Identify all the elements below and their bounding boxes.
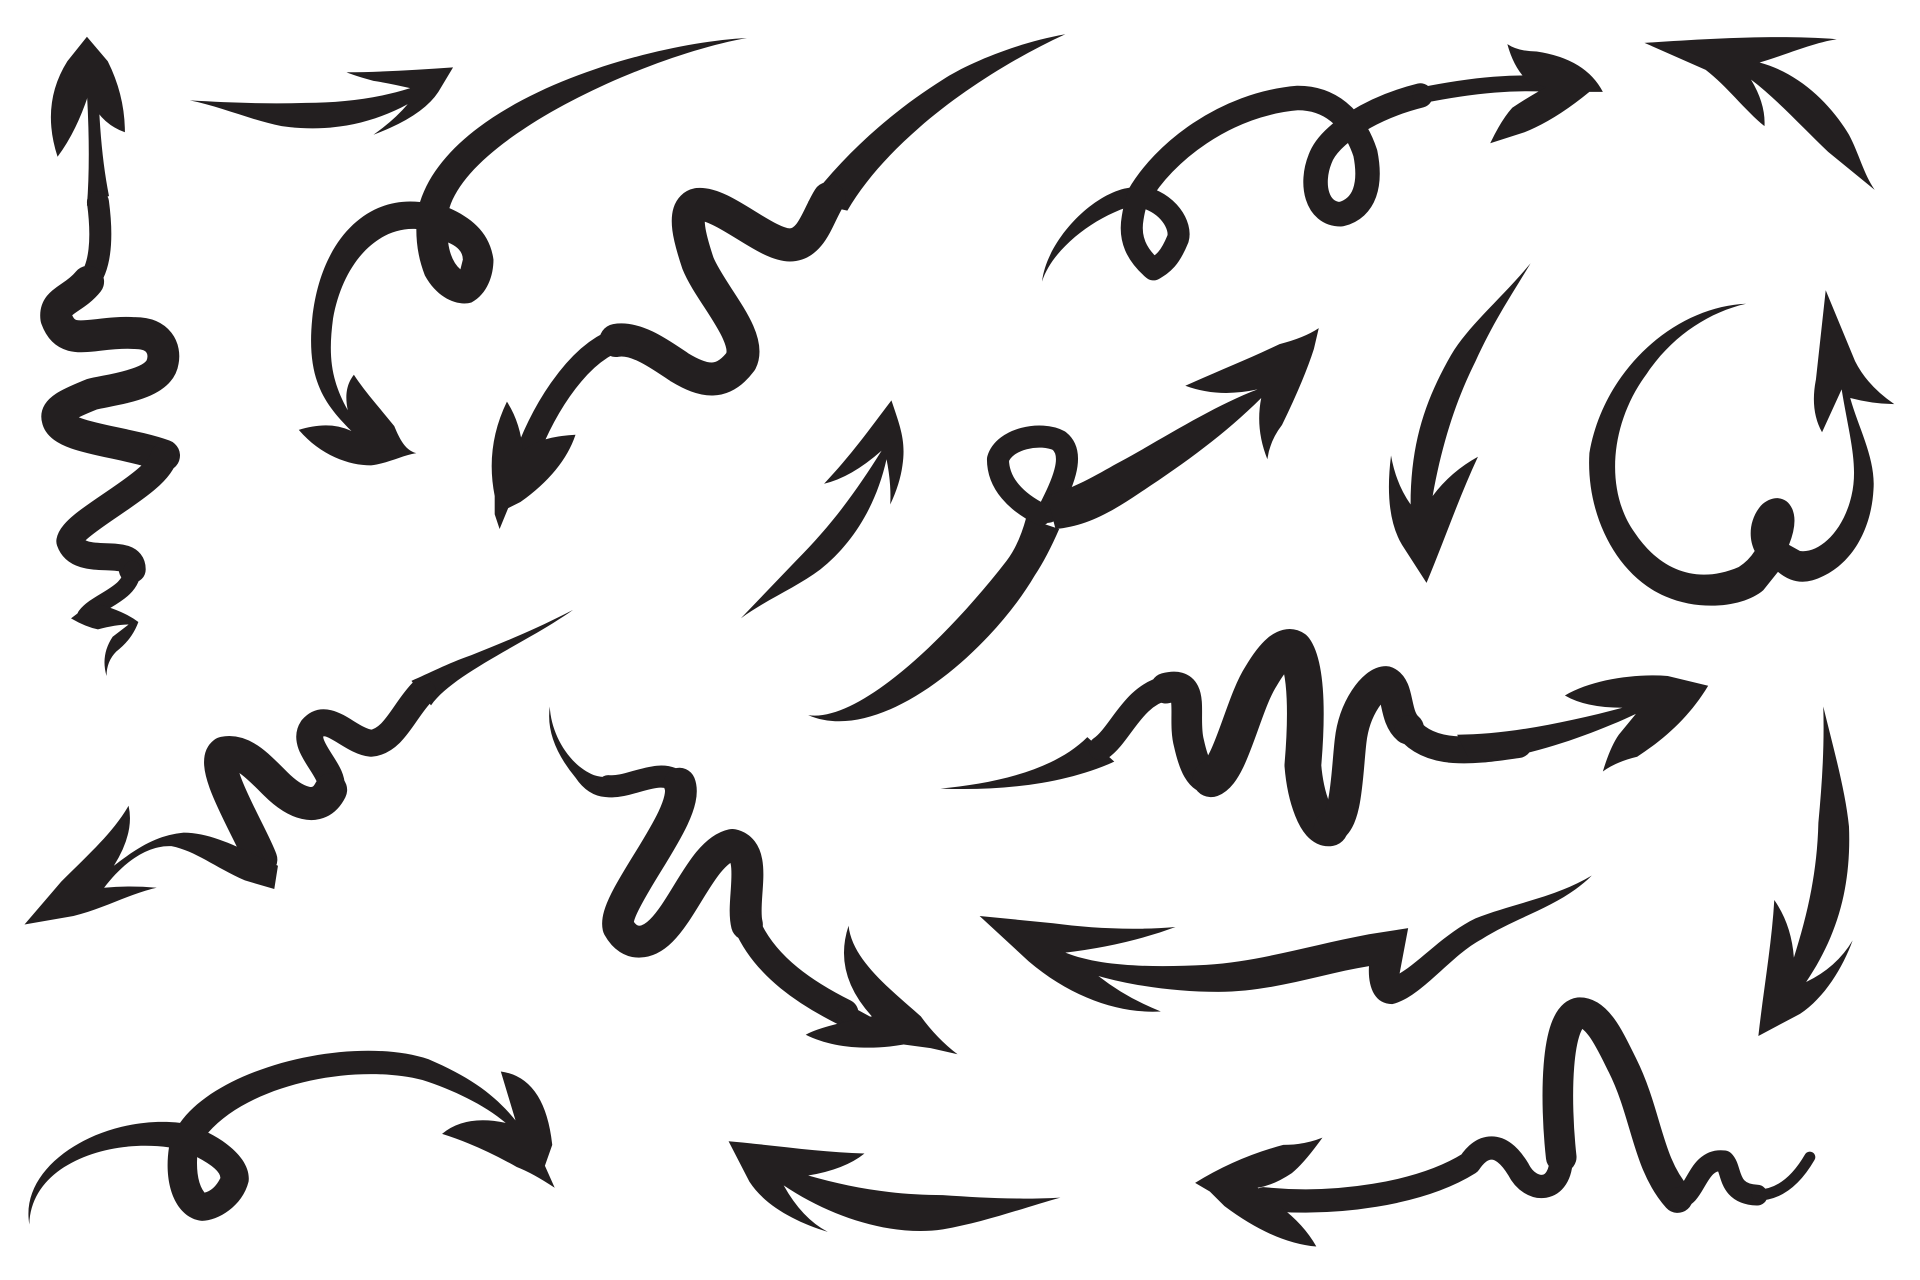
arrow: bottom right squiggle leftward	[1195, 1013, 1810, 1247]
arrow: top left horizontal	[190, 67, 453, 135]
arrow: long wavy diagonal	[492, 34, 1065, 529]
arrow: middle wavy descending	[549, 707, 958, 1054]
arrow: lower left wavy	[24, 610, 573, 925]
arrow: bottom left looping curve	[28, 1051, 555, 1225]
arrow: right side downward	[1758, 707, 1853, 1036]
arrow: large looping curve	[299, 38, 747, 465]
arrow: circular loop pointing up	[1589, 290, 1894, 606]
arrow: top right corner	[1644, 37, 1875, 190]
arrow: top flourish with two loops	[1042, 44, 1603, 282]
arrow: left vertical squiggle	[51, 37, 164, 676]
arrow: downward diagonal	[1389, 263, 1531, 583]
arrow: central zigzag to the right	[940, 647, 1708, 828]
arrow: bottom center leftward	[729, 1141, 1060, 1232]
arrow: lower center long leftward	[980, 876, 1592, 1012]
arrow: long diagonal with loop	[808, 328, 1319, 721]
arrow: small upward diagonal	[741, 400, 904, 618]
